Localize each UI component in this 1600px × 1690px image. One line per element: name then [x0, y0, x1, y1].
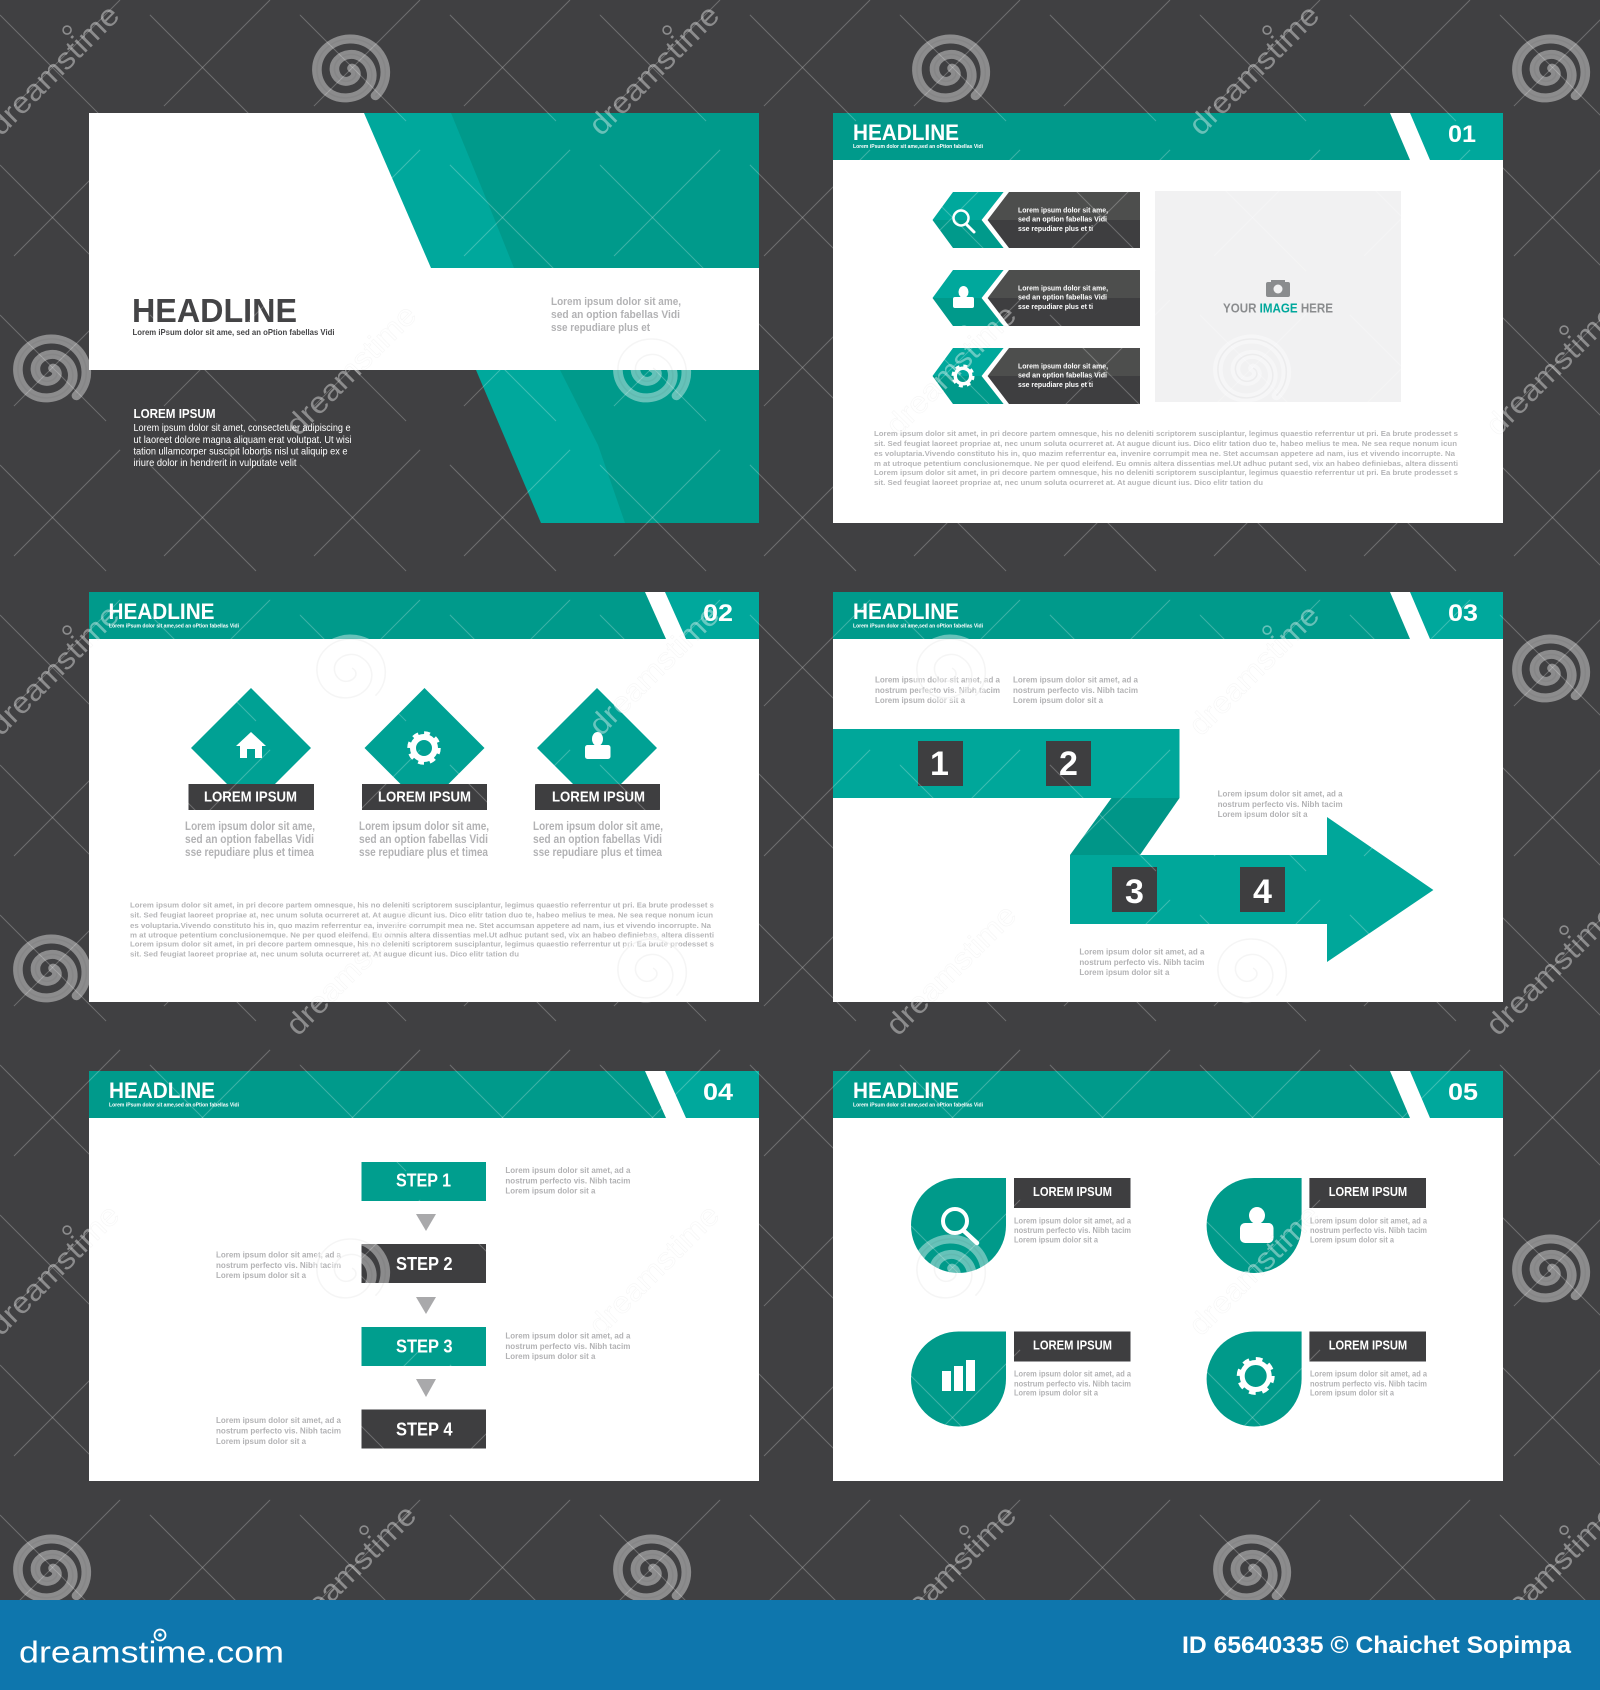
- text block: step 3: Lorem ipsum dolor sit amet, ad a: [505, 1330, 631, 1340]
- item: home: sed an option fabellas Vidi: [185, 832, 314, 846]
- body text: sit. Sed feugiat laoreet propriae at, nec unum soluta ocurreret at. At augue dicunt ius. Dico elitr tation du: [130, 950, 519, 959]
- header bar: Lorem iPsum dolor sit ame,sed an oPtion fabellas Vidi: [853, 624, 983, 630]
- body text: Lorem ipsum dolor sit amet, in pri decore partem omnesque, his no deleniti scriptorem susciplantur, legimus quaestio referrentur ut pri. Ea brute prodesset s: [874, 429, 1458, 438]
- teal upper shape: [364, 113, 759, 268]
- icon: person: [1240, 1207, 1274, 1243]
- header bar: Lorem iPsum dolor sit ame,sed an oPtion fabellas Vidi: [109, 624, 239, 630]
- arrow: step 1 to 2: [416, 1214, 436, 1231]
- header bar: HEADLINE: [109, 1078, 215, 1103]
- text block: step 4: Lorem ipsum dolor sit a: [216, 1436, 306, 1446]
- text block: white lorem ipsum: LOREM IPSUM: [134, 407, 216, 421]
- image placeholder: [1155, 191, 1401, 402]
- text block: right: [1218, 789, 1343, 819]
- panel: title slide: [89, 113, 759, 523]
- text block: step 4: [216, 1415, 341, 1446]
- header bar: 02: [703, 600, 733, 627]
- number box 1: 1: [930, 745, 949, 783]
- chevron item: gear: sed an option fabellas Vidi: [1018, 373, 1107, 380]
- watermark overlay: dreamstime: [1183, 0, 1326, 142]
- icon: bars: [942, 1360, 975, 1391]
- item: home: sse repudiare plus et timea: [185, 845, 314, 859]
- panel: slide 05: [833, 1071, 1503, 1481]
- step 4: STEP 4: [396, 1420, 452, 1440]
- icon: person: [585, 732, 610, 759]
- chevron item: person: [932, 270, 1140, 326]
- text block: right: sse repudiare plus et: [551, 322, 650, 334]
- item: home: LOREM IPSUM: [204, 789, 297, 806]
- icon: gear: [1239, 1359, 1273, 1393]
- number box 3: [1112, 867, 1157, 912]
- header bar: [89, 1071, 759, 1118]
- chevron item: person: sse repudiare plus et ti: [1018, 304, 1093, 311]
- text block: top left: Lorem ipsum dolor sit amet, ad a: [875, 675, 1000, 685]
- body text: [874, 429, 1458, 487]
- panel: slide 04: [89, 1071, 759, 1481]
- text block: white lorem ipsum: tation ullamcorper suscipit lobortis nisl ut aliquip ex e: [134, 446, 348, 458]
- text block: step 1: Lorem ipsum dolor sit amet, ad a: [505, 1165, 631, 1175]
- watermark overlay: dreamstime: [583, 1199, 726, 1342]
- item: gear: [359, 688, 489, 859]
- item: gear: Lorem ipsum dolor sit amet, ad a: [1310, 1369, 1427, 1379]
- header bar: HEADLINE: [853, 599, 959, 624]
- icon: magnifier: [954, 210, 974, 232]
- chevron item: person: Lorem ipsum dolor sit ame,: [1018, 286, 1108, 293]
- body text: sit. Sed feugiat laoreet propriae at, nec unum soluta ocurreret at. At augue dicunt ius. Dico elitr tation duo te, habeo melius te mea. Ne sea reque nonum icun: [874, 439, 1457, 448]
- text block: right: Lorem ipsum dolor sit a: [1218, 809, 1308, 819]
- text block: top middle: Lorem ipsum dolor sit amet, ad a: [1013, 675, 1138, 685]
- text block: step 4: Lorem ipsum dolor sit amet, ad a: [216, 1415, 341, 1425]
- text block: step 2: Lorem ipsum dolor sit a: [216, 1270, 306, 1280]
- chevron item: search: sed an option fabellas Vidi: [1018, 217, 1107, 224]
- panel: slide 03: [833, 592, 1503, 1002]
- item: bar chart: Lorem ipsum dolor sit amet, ad a: [1014, 1369, 1131, 1379]
- footer logo: dreamstime.com: [19, 1634, 284, 1670]
- chevron item: person: sed an option fabellas Vidi: [1018, 295, 1107, 302]
- header bar: 05: [1448, 1079, 1478, 1106]
- header bar: HEADLINE: [108, 599, 214, 624]
- text block: right: Lorem ipsum dolor sit amet, ad a: [1218, 789, 1343, 799]
- body text: sit. Sed feugiat laoreet propriae at, nec unum soluta ocurreret at. At augue dicunt ius. Dico elitr tation duo te, habeo melius te mea. Ne sea reque nonum icun: [130, 911, 713, 920]
- item: person: [1207, 1178, 1427, 1273]
- white slide band: [89, 113, 759, 370]
- step 3: [362, 1327, 486, 1366]
- text block: top left: Lorem ipsum dolor sit a: [875, 695, 965, 705]
- text block: right: Lorem ipsum dolor sit ame,: [551, 296, 681, 308]
- item: person: [533, 688, 663, 859]
- watermark overlay: dreamstime: [880, 899, 1023, 1042]
- body text: sit. Sed feugiat laoreet propriae at, nec unum soluta ocurreret at. At augue dicunt ius. Dico elitr tation du: [874, 478, 1263, 487]
- body text: es voluptaria.Vivendo constituto his in, quo mazim referrentur ea, invenire corrumpit mea ne. Stet accumsan appetere ad nam, ius et vivendo incorrupte. Na: [874, 449, 1456, 458]
- text block: white lorem ipsum: [134, 407, 352, 469]
- text block: bottom: Lorem ipsum dolor sit a: [1079, 967, 1170, 977]
- body text: m at utroque petentium conclusionemque. Ne per quod eleifend. Eu omnis altera dissentias mel.Ut adhuc putant sed, vix an habeo definiebas, altera dissenti: [874, 459, 1458, 468]
- text block: top middle: Lorem ipsum dolor sit a: [1013, 695, 1103, 705]
- number box 2: [1046, 741, 1091, 786]
- item: search: Lorem ipsum dolor sit amet, ad a: [1014, 1215, 1131, 1225]
- teal lower shape: [476, 370, 759, 523]
- item: person: Lorem ipsum dolor sit amet, ad a: [1310, 1215, 1427, 1225]
- icon: person: [953, 286, 974, 308]
- item: gear: sed an option fabellas Vidi: [359, 832, 488, 846]
- item: home: Lorem ipsum dolor sit ame,: [185, 819, 315, 833]
- header bar: HEADLINE: [853, 1078, 959, 1103]
- watermark overlay: dreamstime: [583, 0, 726, 142]
- icon: gear: [953, 366, 973, 386]
- watermark overlay: dreamstime: [280, 899, 423, 1042]
- item: bar chart: [911, 1332, 1131, 1426]
- item: person: sed an option fabellas Vidi: [533, 832, 662, 846]
- item: gear: nostrum perfecto vis. Nibh tacim: [1310, 1378, 1427, 1388]
- subheading: Lorem iPsum dolor sit ame, sed an oPtion fabellas Vidi: [132, 327, 334, 337]
- icon: gear: [409, 733, 439, 763]
- text block: white lorem ipsum: Lorem ipsum dolor sit amet, consectetuer adipiscing e: [134, 422, 351, 434]
- item: gear: [1207, 1332, 1427, 1426]
- slide background: [833, 113, 1503, 523]
- number box 2: 2: [1059, 745, 1078, 783]
- text block: step 3: nostrum perfecto vis. Nibh tacim: [505, 1341, 631, 1351]
- header bar: [833, 592, 1503, 639]
- text block: step 2: Lorem ipsum dolor sit amet, ad a: [216, 1250, 341, 1260]
- icon: magnifier: [943, 1209, 977, 1243]
- text block: step 3: Lorem ipsum dolor sit a: [505, 1351, 596, 1361]
- image placeholder: YOUR IMAGE HERE: [1223, 301, 1333, 316]
- body text: Lorem ipsum dolor sit amet, in pri decore partem omnesque, his no deleniti scriptorem susciplantur, legimus quaestio referrentur ut pri. Ea brute prodesset s: [130, 901, 714, 910]
- header bar: [833, 1071, 1503, 1118]
- body text: [130, 901, 714, 959]
- step 3: STEP 3: [396, 1337, 452, 1357]
- step 1: STEP 1: [396, 1171, 451, 1191]
- header bar: [833, 113, 1503, 160]
- item: gear: LOREM IPSUM: [1329, 1337, 1407, 1352]
- text block: right: sed an option fabellas Vidi: [551, 309, 680, 321]
- item: bar chart: LOREM IPSUM: [1033, 1337, 1112, 1352]
- header bar: Lorem iPsum dolor sit ame,sed an oPtion fabellas Vidi: [853, 144, 983, 150]
- text block: step 4: nostrum perfecto vis. Nibh tacim: [216, 1426, 341, 1436]
- text block: white lorem ipsum: ut laoreet dolore magna aliquam erat volutpat. Ut wisi: [134, 434, 352, 446]
- chevron item: search: sse repudiare plus et ti: [1018, 226, 1093, 233]
- icon: house: [236, 732, 266, 758]
- item: person: LOREM IPSUM: [1329, 1184, 1407, 1199]
- item: person: Lorem ipsum dolor sit ame,: [533, 819, 663, 833]
- body text: Lorem ipsum dolor sit amet, in pri decore partem omnesque, his no deleniti scriptorem susciplantur, legimus quaestio referrentur ut pri. Ea brute prodesset s: [130, 940, 714, 949]
- item: search: [911, 1178, 1131, 1273]
- text block: step 1: nostrum perfecto vis. Nibh tacim: [505, 1175, 631, 1185]
- watermark overlay: dreamstime: [1183, 599, 1326, 742]
- item: search: Lorem ipsum dolor sit a: [1014, 1234, 1098, 1244]
- header bar: 04: [703, 1079, 734, 1106]
- header bar: HEADLINE: [853, 120, 959, 145]
- step 2: STEP 2: [396, 1254, 452, 1274]
- watermark overlay: dreamstime: [880, 299, 1023, 442]
- text block: top left: nostrum perfecto vis. Nibh tacim: [875, 685, 1000, 695]
- text block: step 2: nostrum perfecto vis. Nibh tacim: [216, 1260, 341, 1270]
- text block: right: nostrum perfecto vis. Nibh tacim: [1218, 799, 1343, 809]
- white band over teal: [431, 268, 759, 370]
- slide background: [89, 592, 759, 1002]
- text block: right: [551, 296, 681, 334]
- header bar: [89, 592, 759, 639]
- icon: camera: [1266, 280, 1290, 297]
- footer bar: [0, 1600, 1600, 1690]
- item: bar chart: Lorem ipsum dolor sit a: [1014, 1388, 1098, 1398]
- text block: step 2: [216, 1250, 341, 1280]
- step 2: [362, 1244, 486, 1283]
- item: gear: LOREM IPSUM: [378, 789, 471, 806]
- number box 4: [1240, 867, 1285, 912]
- text block: step 1: Lorem ipsum dolor sit a: [505, 1186, 596, 1196]
- number box 1: [918, 741, 963, 786]
- chevron item: gear: sse repudiare plus et ti: [1018, 382, 1093, 389]
- slide background: [833, 592, 1503, 1002]
- text block: step 1: [505, 1165, 631, 1196]
- text block: bottom: [1079, 947, 1205, 977]
- heading: HEADLINE: [132, 292, 297, 329]
- text block: top left: [875, 675, 1000, 705]
- watermark overlay: dreamstime: [280, 1499, 423, 1642]
- item: person: Lorem ipsum dolor sit a: [1310, 1234, 1394, 1244]
- text block: bottom: nostrum perfecto vis. Nibh tacim: [1079, 957, 1205, 967]
- chevron item: search: [932, 192, 1140, 248]
- item: home: [185, 688, 315, 859]
- image credit: ID 65640335 © Chaichet Sopimpa: [1182, 1632, 1571, 1659]
- item: person: nostrum perfecto vis. Nibh tacim: [1310, 1225, 1427, 1235]
- step 4: [362, 1410, 486, 1448]
- item: gear: sse repudiare plus et timea: [359, 845, 488, 859]
- chevron item: gear: [932, 348, 1140, 404]
- item: search: nostrum perfecto vis. Nibh tacim: [1014, 1225, 1131, 1235]
- item: person: sse repudiare plus et timea: [533, 845, 662, 859]
- header bar: Lorem iPsum dolor sit ame,sed an oPtion fabellas Vidi: [853, 1102, 983, 1108]
- number box 3: 3: [1125, 873, 1144, 911]
- text block: top middle: [1013, 675, 1138, 705]
- slide background: [89, 1071, 759, 1481]
- watermark overlay: dreamstime: [583, 599, 726, 742]
- chevron item: gear: Lorem ipsum dolor sit ame,: [1018, 364, 1108, 371]
- text block: top middle: nostrum perfecto vis. Nibh tacim: [1013, 685, 1138, 695]
- slide background: [833, 1071, 1503, 1481]
- item: bar chart: nostrum perfecto vis. Nibh tacim: [1014, 1378, 1131, 1388]
- panel: slide 01: [833, 113, 1503, 523]
- text block: bottom: Lorem ipsum dolor sit amet, ad a: [1079, 947, 1205, 957]
- text block: white lorem ipsum: iriure dolor in hendrerit in vulputate velit: [134, 457, 297, 469]
- text block: step 3: [505, 1330, 631, 1361]
- watermark overlay: dreamstime: [1183, 1199, 1326, 1342]
- watermark overlay: dreamstime: [880, 1499, 1023, 1642]
- header bar: Lorem iPsum dolor sit ame,sed an oPtion fabellas Vidi: [109, 1102, 239, 1108]
- panel: slide 02: [89, 592, 759, 1002]
- header bar: 01: [1448, 121, 1476, 148]
- arrow: step 2 to 3: [416, 1297, 436, 1314]
- body text: Lorem ipsum dolor sit amet, in pri decore partem omnesque, his no deleniti scriptorem susciplantur, legimus quaestio referrentur ut pri. Ea brute prodesset s: [874, 468, 1458, 477]
- watermark overlay: dreamstime: [280, 299, 423, 442]
- item: person: LOREM IPSUM: [552, 789, 645, 806]
- item: gear: Lorem ipsum dolor sit ame,: [359, 819, 489, 833]
- body text: es voluptaria.Vivendo constituto his in, quo mazim referrentur ea, invenire corrumpit mea ne. Stet accumsan appetere ad nam, ius et vivendo incorrupte. Na: [130, 921, 712, 930]
- arrow: step 3 to 4: [416, 1379, 436, 1397]
- item: gear: Lorem ipsum dolor sit a: [1310, 1388, 1394, 1398]
- number box 4: 4: [1253, 873, 1272, 911]
- header bar: 03: [1448, 600, 1478, 627]
- arrow ribbon: [833, 729, 1433, 962]
- step 1: [362, 1162, 486, 1201]
- chevron item: search: Lorem ipsum dolor sit ame,: [1018, 208, 1108, 215]
- body text: m at utroque petentium conclusionemque. Ne per quod eleifend. Eu omnis altera dissentias mel.Ut adhuc putant sed, vix an habeo definiebas, altera dissenti: [130, 930, 714, 940]
- item: search: LOREM IPSUM: [1033, 1184, 1112, 1199]
